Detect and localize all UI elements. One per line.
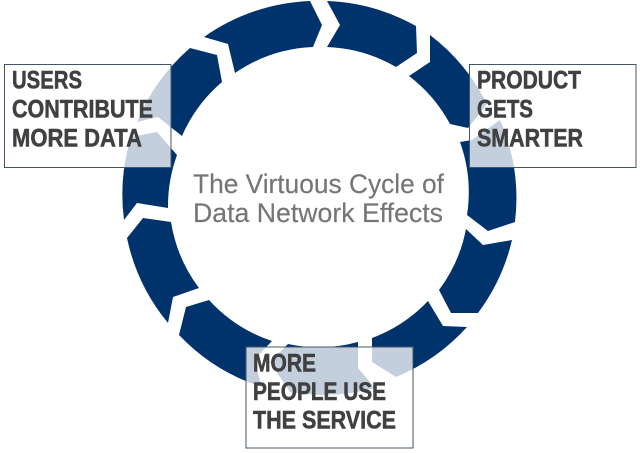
callout: users contribute more data: USERS <box>12 66 82 94</box>
center title: The Virtuous Cycle of <box>193 169 444 199</box>
callout: more people use the service: THE SERVICE <box>253 406 396 434</box>
callout: users contribute more data <box>4 64 171 168</box>
callout: users contribute more data: CONTRIBUTE <box>12 96 153 124</box>
callout: users contribute more data: MORE DATA <box>12 124 142 152</box>
cycle ring of arrows <box>122 1 516 395</box>
callout: product gets smarter: PRODUCT <box>477 66 581 94</box>
callout: more people use the service: MORE <box>253 350 316 378</box>
callout: more people use the service: PEOPLE USE <box>253 378 386 406</box>
callout: more people use the service <box>246 347 413 448</box>
callout: product gets smarter <box>470 64 636 168</box>
arrow segment: upper right <box>409 35 487 128</box>
arrow segment: lower right <box>439 229 512 313</box>
arrow segment: lower left <box>127 218 199 323</box>
arrow segment: bottom left <box>179 300 272 387</box>
callout: product gets smarter: SMARTER <box>477 124 583 152</box>
arrow segment: left <box>122 132 177 220</box>
arrow segment: bottom right <box>372 301 467 377</box>
arrow segment: top right <box>327 1 417 67</box>
callout: product gets smarter: GETS <box>477 96 533 124</box>
center title: Data Network Effects <box>193 198 443 228</box>
arrow segment: top left <box>204 1 322 73</box>
arrow segment: upper left <box>137 48 222 136</box>
center title <box>193 169 444 228</box>
arrow segment: right <box>460 120 516 231</box>
arrow segment: bottom <box>270 342 375 395</box>
